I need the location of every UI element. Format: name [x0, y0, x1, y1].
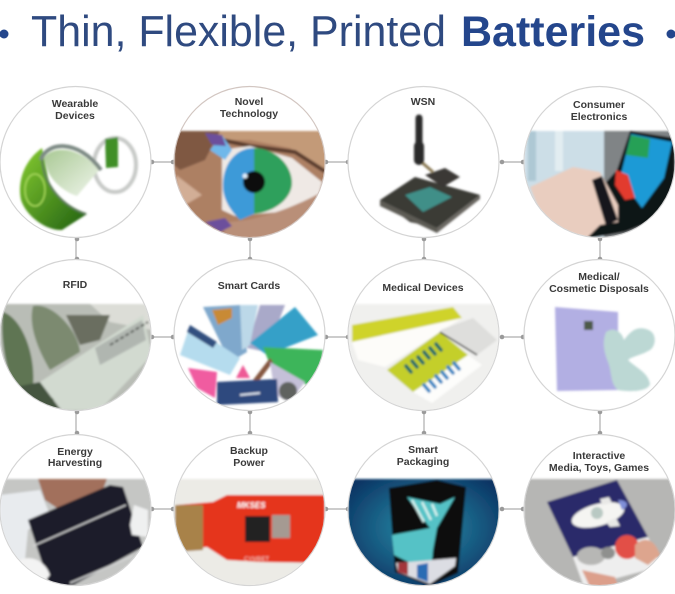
panel: Novel Technology: [174, 86, 326, 242]
panel: Backup Power: [174, 434, 326, 587]
panel: Smart Cards: [174, 260, 325, 410]
label: Smart Cards: Smart Cards: [218, 280, 280, 292]
label: Wearable Devices: Wearable: [52, 98, 98, 110]
panel: WSN: [348, 86, 499, 238]
image: solar cell in gloved hands: [0, 479, 152, 587]
panel: Interactive Media, Toys, Games: [524, 434, 675, 587]
image: red printed circuit board: MKSES: [237, 501, 266, 510]
label: Interactive Media, Toys, Games: Media, Toys, Games: [549, 462, 649, 474]
panel: Wearable Devices: [0, 86, 151, 238]
label: RFID: RFID: [63, 279, 88, 291]
panel: RFID: [0, 260, 152, 412]
panel: Medical/Cosmetic Disposals: [524, 260, 675, 410]
image: holographic package: [348, 479, 500, 587]
label: Novel Technology: Novel: [235, 96, 263, 108]
label: Backup Power: Power: [233, 457, 265, 469]
label: WSN: WSN: [411, 96, 435, 108]
label: Medical Devices: Medical Devices: [382, 282, 464, 294]
title: [0, 7, 675, 56]
connector network: [0, 160, 602, 511]
title: Thin, Flexible, Printed: [31, 7, 446, 56]
image: hand on flexible phone: [524, 131, 675, 240]
image: purple package and mint patch: [555, 307, 655, 391]
label: Wearable Devices: Devices: [55, 110, 95, 122]
image: wireless sensor board with antenna: [380, 118, 480, 233]
image: eye: [174, 131, 326, 242]
title: Batteries: [461, 8, 645, 56]
label: Smart Packaging: Packaging: [397, 456, 449, 468]
icon: wearable band: [20, 137, 136, 230]
image: transparent tag over asparagus: [0, 304, 152, 412]
image: medical device boxes: [348, 304, 500, 412]
label: Smart Packaging: Smart: [408, 444, 438, 456]
panel: Energy Harvesting: [0, 434, 152, 587]
label: Medical/Cosmetic Disposals: Medical/: [578, 271, 620, 283]
image: red printed circuit board: [174, 479, 326, 587]
image: red printed circuit board: CYMBET: [244, 557, 269, 563]
image: fan of smart cards: [180, 305, 323, 405]
panel: Smart Packaging: [348, 434, 500, 587]
label: Medical/Cosmetic Disposals: Cosmetic Disposals: [549, 283, 649, 295]
image: interactive space book: [524, 479, 675, 587]
panel: Consumer Electronics: [524, 86, 675, 240]
label: Interactive Media, Toys, Games: Interactive: [573, 450, 625, 462]
label: Novel Technology: Technology: [220, 108, 278, 120]
label: Backup Power: Backup: [230, 445, 268, 457]
label: Energy Harvesting: Energy: [57, 446, 93, 458]
label: Consumer Electronics: Consumer: [573, 99, 625, 111]
panel: Medical Devices: [348, 260, 500, 412]
label: Consumer Electronics: Electronics: [571, 111, 627, 123]
label: Energy Harvesting: Harvesting: [48, 457, 102, 469]
